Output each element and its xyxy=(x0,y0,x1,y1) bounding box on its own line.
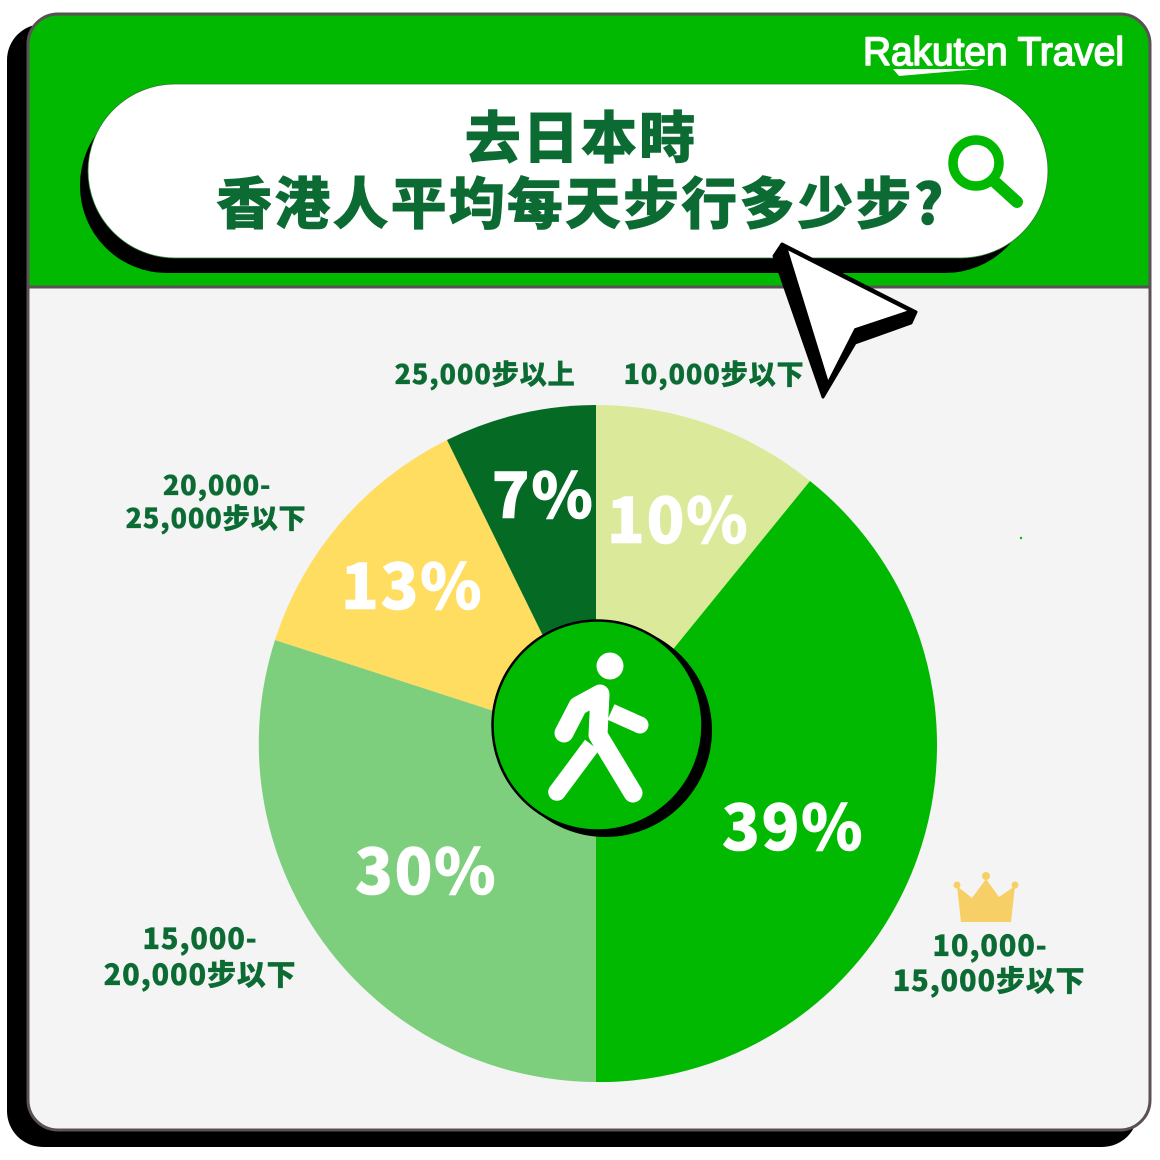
label: 10,000-15,000: 15,000步以下 xyxy=(893,958,1085,1000)
icon: crown xyxy=(954,872,1018,922)
value: 39%: 39% xyxy=(722,777,864,868)
title: 香港人平均每天步行多少步? xyxy=(216,160,946,241)
value: 10%: 10% xyxy=(607,470,749,561)
icon: cursor arrow xyxy=(774,244,916,397)
slice: 7% xyxy=(447,405,596,744)
value: 7%: 7% xyxy=(492,445,594,536)
label: 15,000-20,000: 20,000步以下 xyxy=(104,952,296,994)
slice: 13% xyxy=(275,440,596,744)
slice: 39% xyxy=(596,481,937,1082)
title: 去日本時 xyxy=(465,94,697,175)
label: 10,000-15,000 xyxy=(893,923,1085,1000)
value: 13%: 13% xyxy=(341,536,483,627)
label: 20,000-25,000 xyxy=(125,463,307,536)
label: 25,000+: 25,000步以上 xyxy=(394,352,576,392)
title xyxy=(216,94,946,241)
speck xyxy=(1020,537,1022,539)
center badge: walking person xyxy=(492,620,712,837)
label: 15,000-20,000 xyxy=(104,916,296,994)
header band xyxy=(28,14,1150,287)
label: 15,000-20,000: 15,000- xyxy=(142,916,258,958)
slice: 30% xyxy=(259,640,596,1082)
pie chart xyxy=(259,405,937,1082)
value: 30%: 30% xyxy=(355,821,497,912)
label: 20,000-25,000: 20,000- xyxy=(163,463,271,503)
label: under 10,000: 10,000步以下 xyxy=(623,352,805,392)
logo: Rakuten Travel: Rakuten Travel xyxy=(863,30,1124,74)
slice: 10% xyxy=(596,405,810,744)
search bar xyxy=(80,84,1048,273)
icon: magnifying glass xyxy=(953,140,1017,202)
label: 10,000-15,000: 10,000- xyxy=(932,923,1048,965)
label: 20,000-25,000: 25,000步以下 xyxy=(125,496,307,536)
